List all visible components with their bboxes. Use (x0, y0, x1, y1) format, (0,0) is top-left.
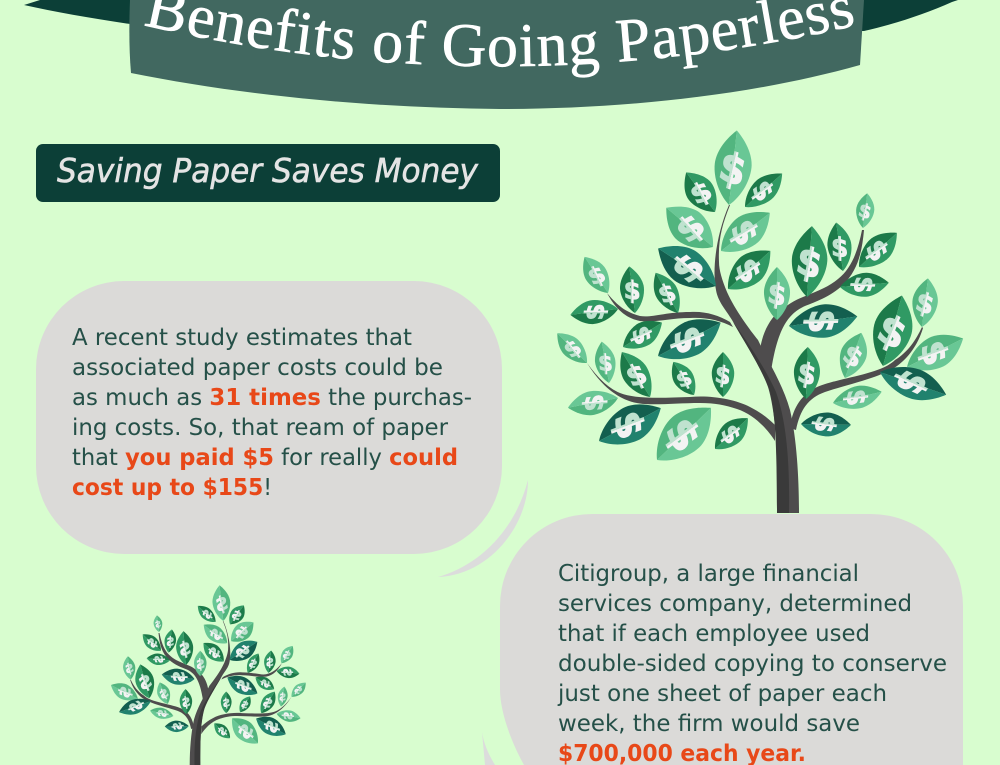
section heading: Saving Paper Saves Money: Saving Paper Saves Money (57, 151, 478, 190)
icon: large money tree: $ (831, 231, 848, 264)
speech bubble: associated paper costs: A recent study estimates that (72, 323, 412, 351)
icon: small money tree: $ (177, 637, 193, 662)
icon: small money tree: $ (199, 606, 215, 622)
icon: large money tree: $ (885, 364, 937, 401)
icon: small money tree: $ (154, 619, 162, 631)
icon: small money tree: $ (247, 656, 260, 671)
icon: large money tree: $ (746, 175, 779, 208)
icon: large money tree: $ (584, 262, 610, 291)
icon: large money tree: $ (859, 234, 894, 268)
icon: small money tree: $ (279, 691, 286, 704)
icon: small money tree: $ (168, 671, 191, 683)
icon: small money tree: $ (169, 721, 186, 731)
icon: small money tree: $ (123, 659, 135, 677)
icon: small money tree: $ (114, 683, 135, 701)
icon: large money tree: $ (626, 321, 658, 349)
icon: small money tree: $ (213, 592, 230, 617)
icon: small money tree: $ (280, 711, 297, 721)
icon: large money tree: $ (856, 199, 873, 225)
speech bubble: Citigroup: just one sheet of paper each (557, 679, 887, 707)
icon: large money tree: $ (665, 320, 712, 360)
icon: small money tree: $ (145, 635, 161, 652)
icon: large money tree: $ (579, 303, 611, 320)
icon: small money tree: $ (123, 698, 148, 715)
icon: large money tree: $ (624, 275, 641, 306)
icon: small money tree: $ (181, 694, 192, 712)
icon: small money tree: $ (136, 670, 155, 696)
speech bubble: Citigroup: Citigroup, a large financial (558, 559, 859, 587)
icon: large money tree: $ (662, 245, 714, 291)
speech bubble: Citigroup (482, 514, 963, 765)
icon: large money tree: $ (715, 419, 746, 450)
speech bubble: associated paper costs: that you paid $5 for really could (72, 443, 458, 471)
icon: large money tree: $ (672, 366, 696, 392)
icon: large money tree: $ (795, 356, 818, 393)
speech bubble: Citigroup: services company, determined (558, 589, 912, 617)
icon: large money tree: $ (799, 309, 844, 334)
icon: large money tree: $ (715, 142, 750, 197)
icon: small money tree: $ (233, 719, 258, 744)
icon: small money tree: $ (280, 668, 295, 676)
icon: small money tree: $ (231, 622, 253, 643)
speech bubble: associated paper costs: ing costs. So, that ream of paper (72, 413, 448, 441)
speech bubble: associated paper costs: cost up to $155! (72, 473, 272, 501)
icon: large money tree: $ (841, 388, 872, 407)
icon: large money tree: $ (847, 276, 881, 294)
icon: small money tree: $ (239, 699, 250, 711)
section heading: Saving Paper Saves Money (36, 144, 500, 202)
icon: small money tree: $ (215, 723, 230, 739)
icon: small money tree: $ (260, 695, 275, 712)
icon: large money tree: $ (728, 251, 768, 290)
icon: large money tree: $ (793, 236, 826, 288)
icon: large money tree: $ (657, 408, 709, 461)
icon: small money tree: $ (205, 624, 226, 644)
icon: large money tree: $ (723, 212, 766, 253)
icon: large money tree (550, 128, 970, 513)
icon: large money tree: $ (912, 286, 937, 322)
icon: small money tree: $ (229, 608, 244, 624)
speech bubble: Citigroup: week, the firm would save (558, 709, 860, 737)
icon: small money tree: $ (266, 654, 274, 670)
icon: small money tree: $ (261, 717, 283, 736)
icon: large money tree: $ (621, 358, 652, 393)
icon: large money tree: $ (668, 207, 713, 250)
icon: large money tree: $ (871, 305, 912, 360)
speech bubble: associated paper costs: as much as 31 times the purchas- (72, 383, 472, 411)
icon: small money tree: $ (230, 641, 254, 663)
speech bubble: associated paper costs: associated paper costs could be (72, 353, 443, 381)
icon: large money tree: $ (685, 176, 717, 211)
icon: large money tree: $ (578, 393, 611, 412)
icon: small money tree: $ (166, 634, 174, 649)
icon: small money tree: $ (258, 677, 273, 690)
icon: large money tree: $ (597, 350, 613, 377)
ribbon banner (24, 0, 958, 109)
icon: small money tree: $ (151, 655, 167, 664)
icon: small money tree: $ (205, 643, 224, 662)
icon: large money tree: $ (654, 278, 680, 309)
icon: large money tree: $ (605, 405, 652, 445)
speech bubble: Citigroup: double-sided copying to conserve (558, 649, 947, 677)
icon: large money tree: $ (766, 276, 788, 313)
icon: small money tree: $ (291, 684, 305, 697)
icon: large money tree: $ (559, 336, 587, 363)
icon: large money tree: $ (838, 339, 867, 375)
icon: small money tree: $ (157, 684, 171, 702)
icon: small money tree: $ (280, 648, 293, 662)
icon: small money tree: $ (233, 677, 255, 696)
icon: large money tree: $ (713, 359, 732, 391)
icon: large money tree: $ (913, 335, 955, 371)
icon: large money tree: $ (807, 414, 842, 435)
speech bubble: Citigroup: that if each employee used (558, 619, 870, 647)
icon: small money tree: $ (222, 695, 231, 711)
speech bubble: associated paper costs (36, 281, 528, 577)
icon: small money tree: $ (195, 656, 206, 674)
icon: small money tree (107, 584, 309, 765)
icon: small money tree: $ (155, 709, 170, 718)
